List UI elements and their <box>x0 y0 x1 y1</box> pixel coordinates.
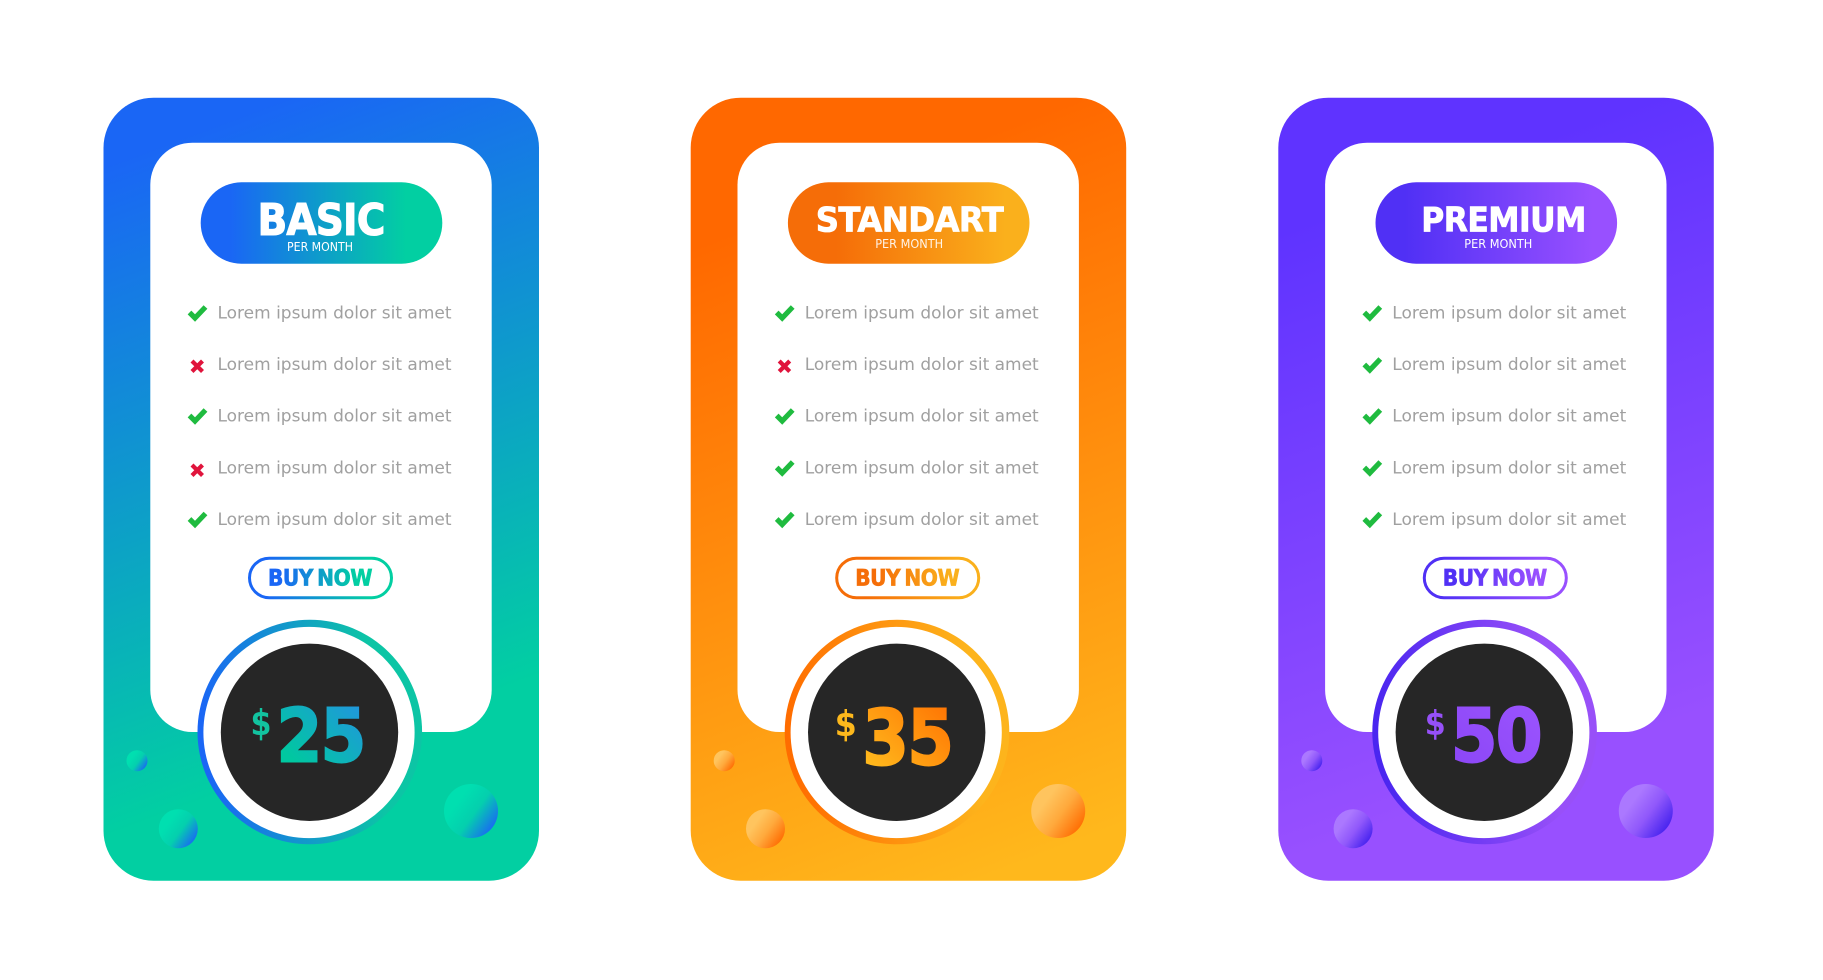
white content area <box>1325 143 1666 732</box>
buy now button <box>837 558 979 598</box>
feature list: Lorem ipsum dolor sit amet <box>805 458 1039 478</box>
feature list <box>190 304 452 530</box>
feature list: Lorem ipsum dolor sit amet <box>218 304 452 324</box>
buy now button <box>250 558 392 598</box>
panel: premium plan <box>1278 98 1714 881</box>
feature list: Lorem ipsum dolor sit amet <box>805 406 1039 426</box>
decorative bubbles <box>126 750 498 848</box>
plan heading pill: PER MONTH <box>875 236 943 251</box>
buy now button: BUY NOW <box>1443 567 1547 592</box>
white content area <box>150 143 492 732</box>
feature list: Lorem ipsum dolor sit amet <box>805 510 1039 530</box>
plan heading pill: BASIC <box>258 195 384 246</box>
feature list: Lorem ipsum dolor sit amet <box>1392 406 1627 426</box>
buy now button: BUY NOW <box>268 567 372 592</box>
price badge <box>785 620 1009 844</box>
card background <box>691 98 1126 881</box>
feature list: Lorem ipsum dolor sit amet <box>218 510 452 530</box>
feature list: Lorem ipsum dolor sit amet <box>1392 304 1627 324</box>
price badge <box>1372 620 1597 844</box>
feature list <box>777 304 1039 530</box>
price badge: 50 <box>1451 694 1541 780</box>
plan heading pill: PREMIUM <box>1421 201 1586 241</box>
decorative bubbles <box>1301 750 1673 848</box>
plan heading pill: STANDART <box>816 201 1005 241</box>
feature list: Lorem ipsum dolor sit amet <box>805 304 1039 324</box>
card background <box>104 98 539 881</box>
price badge: $ <box>250 703 272 744</box>
plan heading pill <box>1376 182 1617 264</box>
feature list <box>1364 304 1627 530</box>
plan heading pill: PER MONTH <box>287 239 353 254</box>
price badge <box>197 620 422 844</box>
white content area <box>738 143 1079 732</box>
decorative bubbles <box>714 750 1085 848</box>
card background <box>1278 98 1714 881</box>
panel: standart plan <box>691 98 1126 881</box>
price badge: $ <box>835 704 857 745</box>
panel: basic plan <box>104 98 539 881</box>
price badge: $ <box>1425 704 1446 744</box>
buy now button <box>1424 558 1566 598</box>
price badge: 35 <box>862 694 952 784</box>
plan heading pill: PER MONTH <box>1464 236 1532 251</box>
plan heading pill <box>788 182 1030 264</box>
feature list: Lorem ipsum dolor sit amet <box>1392 355 1627 375</box>
price badge: 25 <box>276 694 364 780</box>
buy now button: BUY NOW <box>855 567 959 592</box>
feature list: Lorem ipsum dolor sit amet <box>1392 458 1627 478</box>
feature list: Lorem ipsum dolor sit amet <box>1392 510 1627 530</box>
feature list: Lorem ipsum dolor sit amet <box>218 355 452 375</box>
plan heading pill <box>201 182 442 264</box>
feature list: Lorem ipsum dolor sit amet <box>805 355 1039 375</box>
feature list: Lorem ipsum dolor sit amet <box>218 458 452 478</box>
feature list: Lorem ipsum dolor sit amet <box>218 406 452 426</box>
